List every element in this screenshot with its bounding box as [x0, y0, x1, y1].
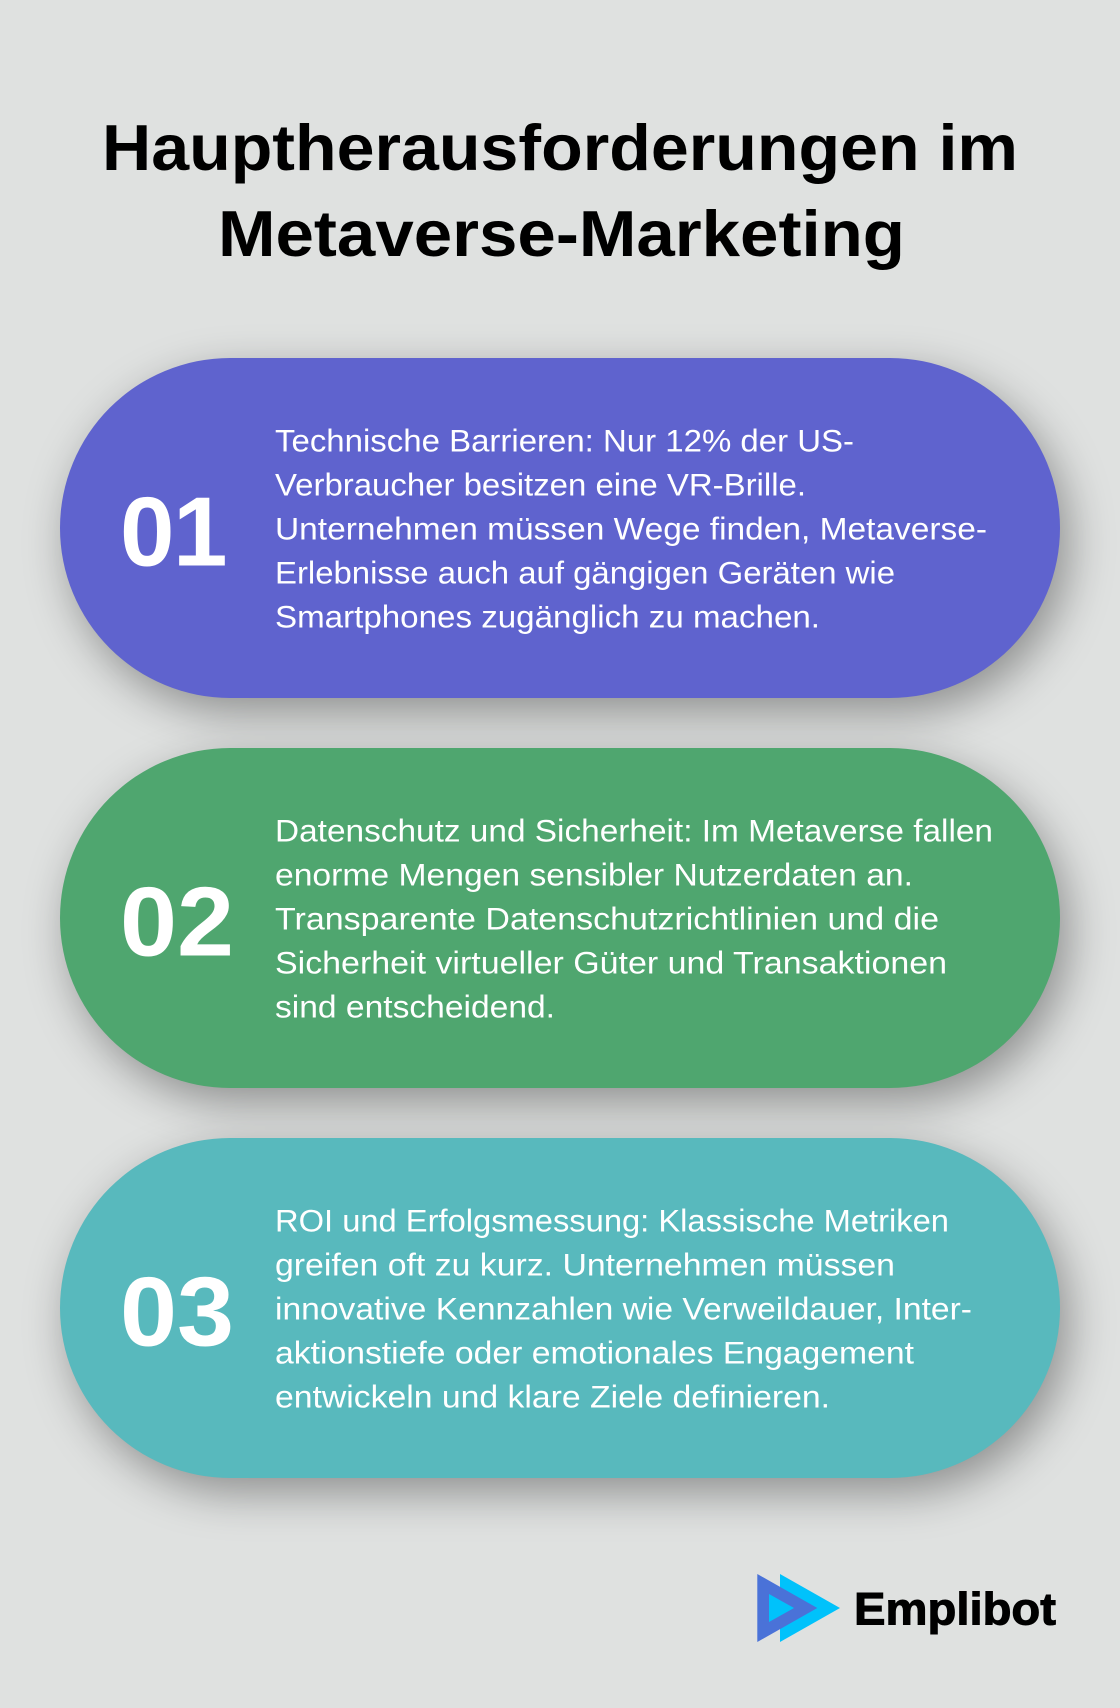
body text: Transparente Datenschutzrichtlinien und die — [275, 901, 939, 937]
title: Metaverse-Marketing — [218, 197, 905, 270]
body text: aktionstiefe oder emotionales Engagement — [275, 1335, 914, 1371]
logo wordmark: Emplibot — [854, 1583, 1056, 1634]
body text: entwickeln und klare Ziele definieren. — [275, 1379, 830, 1415]
body text: sind entscheidend. — [275, 989, 555, 1025]
step number 03: 03 — [120, 1256, 234, 1366]
icon: play triangles — [757, 1574, 840, 1642]
body text: Datenschutz und Sicherheit: Im Metaverse fallen — [275, 813, 993, 849]
body text: greifen oft zu kurz. Unternehmen müssen — [275, 1247, 895, 1283]
logo: Emplibot — [757, 1574, 1056, 1642]
body text: Verbraucher besitzen eine VR-Brille. — [275, 467, 806, 503]
body text: Sicherheit virtueller Güter und Transaktionen — [275, 945, 947, 981]
body text — [275, 423, 987, 635]
body text: Unternehmen müssen Wege finden, Metaverse- — [275, 511, 987, 547]
body text: innovative Kennzahlen wie Verweildauer, Inter- — [275, 1291, 972, 1327]
panel: ROI und Erfolgsmessung — [60, 1138, 1060, 1478]
step number 01: 01 — [120, 476, 228, 586]
body text: Smartphones zugänglich zu machen. — [275, 599, 820, 635]
panel: technische Barrieren — [60, 358, 1060, 698]
body text: Technische Barrieren: Nur 12% der US- — [275, 423, 854, 459]
body text — [275, 1203, 972, 1415]
title: Hauptherausforderungen im — [102, 111, 1018, 184]
body text — [275, 813, 993, 1025]
step number 02: 02 — [120, 866, 234, 976]
body text: Erlebnisse auch auf gängigen Geräten wie — [275, 555, 895, 591]
panel: Datenschutz und Sicherheit — [60, 748, 1060, 1088]
title — [102, 111, 1018, 270]
body text: enorme Mengen sensibler Nutzerdaten an. — [275, 857, 913, 893]
body text: ROI und Erfolgsmessung: Klassische Metriken — [275, 1203, 949, 1239]
